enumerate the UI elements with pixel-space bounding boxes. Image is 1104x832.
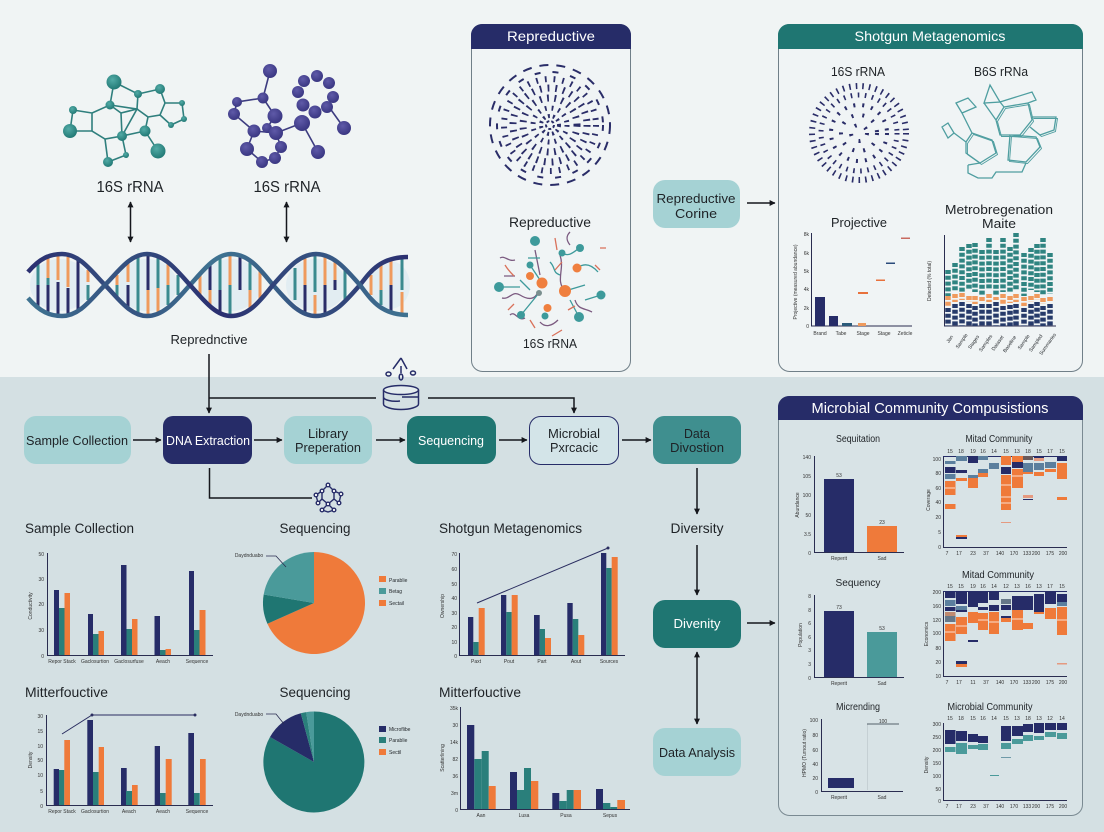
bar chart: mitterfouctive left — [28, 714, 213, 815]
chart: two bars navy orange: 100 — [803, 493, 811, 499]
chart: two bars navy teal — [798, 594, 904, 687]
arrow: double — [696, 652, 698, 724]
chart: stacked blocks 3: 23 — [970, 804, 976, 810]
chart: stacked blocks 3: 150 — [933, 761, 941, 767]
chart: two bars navy teal: 3 — [808, 648, 811, 654]
bar chart: sample collection: 50 — [38, 552, 44, 558]
chart: stacked blocks 1: 0 — [938, 545, 941, 551]
legend: Parablie — [389, 578, 408, 584]
bar chart: mitterfouctive left: Density — [28, 751, 34, 768]
heading: Mitad Community: Mitad Community — [966, 434, 1032, 445]
bar chart: mitterfouctive left: 10 — [37, 744, 43, 750]
chart: stacked blocks 3: 200 — [933, 748, 941, 754]
panel: Reproductive — [471, 24, 631, 372]
box: Sample Collection: Sample Collection — [26, 433, 128, 448]
chart: stacked dotted columns: Dataset — [991, 334, 1006, 352]
chart: stacked blocks 2: 7 — [946, 680, 949, 686]
chart: stacked blocks 3: 15 — [947, 716, 953, 722]
bar chart: shotgun metagenomics: Part — [537, 659, 547, 665]
heading: Mitterfouctive right: Mitterfouctive — [439, 684, 521, 700]
chart: stacked blocks 3: 14 — [1059, 716, 1065, 722]
chart: two bars navy orange — [795, 455, 904, 562]
chart: stacked blocks 3: 18 — [958, 716, 964, 722]
arrow — [696, 545, 698, 595]
heading: Mitterfouctive left: Mitterfouctive — [25, 684, 108, 700]
chart: stacked blocks 1: 18 — [1025, 449, 1031, 455]
bar chart: shotgun metagenomics: 30 — [451, 611, 457, 617]
bar chart: mitterfouctive left: Gaclosurtion — [81, 809, 109, 815]
chart: two bars navy teal: 0 — [808, 676, 811, 682]
bar chart: shotgun metagenomics: Ownership — [440, 594, 446, 618]
chart: stacked blocks 2: 11 — [970, 680, 976, 686]
bar chart: mitterfouctive right: Lusa — [519, 813, 530, 819]
chart: stacked blocks 1: 40 — [935, 500, 941, 506]
panel: Shotgun Metagenomics — [778, 24, 1083, 372]
chart: two bars navy orange: 50 — [805, 513, 811, 519]
panel title: Repreductive — [507, 28, 595, 44]
bar chart: mitterfouctive left: 15 — [37, 729, 43, 735]
chart: two bars navy teal: 3 — [808, 662, 811, 668]
chart: two bars navy teal: 6 — [808, 621, 811, 627]
heading: Microbial Community: Microbial Community — [948, 702, 1032, 713]
chart: stacked blocks 1: 15 — [1003, 449, 1009, 455]
chart: stacked blocks 2: 100 — [933, 631, 941, 637]
bar chart: mitterfouctive right: Scatterlining — [440, 744, 446, 772]
heading: Micrending: Micrending — [836, 702, 880, 713]
label: B6S rRNa: B6S rRNa — [974, 64, 1029, 79]
bar chart: sample collection: Gaclosurtion — [81, 659, 109, 665]
arrow — [133, 439, 161, 441]
heading: Shotgun Metagenomics chart: Shotgun Metagenomics — [439, 520, 582, 536]
chart: projective bars: Projective (measured abundance) — [793, 244, 799, 320]
bar chart: mitterfouctive right: 36 — [452, 774, 458, 780]
arrow: double right — [286, 202, 288, 242]
bar chart: shotgun metagenomics: 60 — [451, 567, 457, 573]
chart: projective bars: 6k — [804, 251, 809, 257]
chart: stacked blocks 2: 17 — [956, 680, 962, 686]
chart: stacked dotted columns: Sample — [955, 333, 970, 350]
chart: stacked blocks 3: 18 — [1025, 716, 1031, 722]
chart: stacked blocks 2: 200 — [1032, 680, 1040, 686]
box: Sequencing: Sequencing — [418, 433, 484, 448]
box: Library Preparation — [284, 416, 372, 464]
icon: radial dot ring — [812, 86, 906, 180]
box: Microbial Parcacic: Pxrcacic — [550, 440, 598, 455]
chart: stacked blocks 2: 133 — [1023, 680, 1031, 686]
chart: stacked blocks 3: 175 — [1046, 804, 1054, 810]
chart: projective bars: 8k — [804, 232, 809, 238]
heading: Sample Collection: Sample Collection — [25, 520, 134, 536]
label: 16S rRNA: 16S rRNA — [523, 336, 577, 351]
bar chart: mitterfouctive right: 0 — [455, 808, 458, 814]
chart: stacked blocks 1: 60 — [935, 486, 941, 492]
chart: stacked blocks 1: 14 — [991, 449, 997, 455]
chart: projective bars: 4k — [804, 287, 809, 293]
label: Metrobregenation Maite: Metrobregenation — [945, 202, 1053, 217]
box: Divenity — [653, 600, 741, 648]
label: Projective: Projective — [831, 215, 887, 230]
arrow — [696, 468, 698, 514]
chart: stacked blocks 1: 200 — [1032, 551, 1040, 557]
chart: stacked blocks 1: 18 — [958, 449, 964, 455]
chart: stacked dotted columns: Detected (% total) — [927, 261, 933, 301]
bar chart: sample collection: 20 — [38, 602, 44, 608]
bar chart: shotgun metagenomics: 50 — [451, 582, 457, 588]
chart: stacked blocks 3: 300 — [933, 722, 941, 728]
arrow — [254, 439, 282, 441]
chart: projective bars: Stage — [856, 331, 870, 337]
heading: Sequencing pie lower: Sequencing — [280, 684, 350, 700]
bar chart: shotgun metagenomics: 10 — [451, 640, 457, 646]
chart: stacked blocks 3: 13 — [1036, 716, 1042, 722]
box: DNA Extraction: DNA Extraction — [166, 433, 250, 448]
chart: stacked blocks 1: 133 — [1023, 551, 1031, 557]
chart: micrending bars: 80 — [812, 733, 818, 739]
heading: Sequency: Sequency — [836, 578, 880, 589]
chart: micrending bars: 0 — [815, 790, 818, 796]
bar chart: mitterfouctive right: Pusa — [560, 813, 572, 819]
chart: stacked blocks 1: 17 — [1047, 449, 1053, 455]
bar chart: shotgun metagenomics: 70 — [451, 552, 457, 558]
box: Library Preparation: Library — [308, 426, 348, 441]
chart: stacked blocks 3: 16 — [980, 716, 986, 722]
bar chart: mitterfouctive left: 30 — [37, 714, 43, 720]
connector: DNA Extraction to network icon — [210, 468, 343, 512]
bar chart: sample collection: Conductivity — [28, 592, 34, 620]
chart: stacked blocks 2: 175 — [1046, 680, 1054, 686]
label: Reprednctive: Reprednctive — [170, 332, 248, 347]
box: Data Analysis — [653, 728, 741, 776]
bar chart: sample collection: Repor Stack — [48, 659, 76, 665]
chart: stacked blocks 1: 37 — [983, 551, 989, 557]
arrow — [747, 622, 775, 624]
arrow — [376, 439, 405, 441]
heading: Sequencing pie: Sequencing — [280, 520, 350, 536]
chart: stacked blocks 3: 250 — [933, 735, 941, 741]
chart: stacked blocks 2: 200 — [933, 590, 941, 596]
box: Divenity: Divenity — [674, 616, 721, 631]
chart: stacked blocks 2: 12 — [1003, 584, 1009, 590]
chart: stacked blocks 1: 100 — [933, 457, 941, 463]
chart: stacked dotted columns: Samples — [978, 333, 995, 353]
chart: stacked blocks 3: 50 — [935, 787, 941, 793]
box: Microbial Parcacic — [530, 416, 618, 464]
label: Metrobregenation Maite — [945, 202, 1053, 231]
chart: stacked blocks 2: 15 — [1059, 584, 1065, 590]
legend — [379, 726, 411, 756]
process connector: top line with icon — [209, 354, 574, 413]
legend: Betag — [389, 589, 402, 595]
bar chart: mitterfouctive right: 82 — [452, 757, 458, 763]
chart: stacked blocks 2: 200 — [1059, 680, 1067, 686]
chart: stacked blocks 3: Density — [924, 756, 930, 773]
chart: stacked blocks 2: 16 — [1025, 584, 1031, 590]
chart: two bars navy teal: 8 — [808, 608, 811, 614]
panel title: Shotgun Metagenomics — [854, 28, 1006, 44]
bar chart: shotgun metagenomics: Paxt — [471, 659, 482, 665]
bar chart: shotgun metagenomics: Aout — [571, 659, 582, 665]
chart: stacked dotted columns: Baseline — [1002, 335, 1018, 354]
chart: stacked blocks 2: 37 — [983, 680, 989, 686]
bar chart: mitterfouctive left: 10 — [37, 773, 43, 779]
chart: stacked blocks 2: 16 — [980, 584, 986, 590]
legend — [379, 576, 408, 607]
panel header — [778, 396, 1083, 420]
chart: two bars navy orange: Abundance — [795, 492, 801, 518]
chart: stacked blocks 2: Economics — [924, 621, 930, 646]
chart: projective bars: Brand — [813, 331, 827, 337]
chart: micrending bars: Sad — [878, 795, 887, 801]
chart: stacked blocks 3: 7 — [946, 804, 949, 810]
icon: radial dashed ring — [490, 65, 610, 185]
bar chart: mitterfouctive left: Aeach — [156, 809, 170, 815]
chart: micrending bars: 60 — [812, 748, 818, 754]
box: Sequencing — [407, 416, 496, 464]
label: Metrobregenation Maite: Maite — [982, 216, 1016, 231]
chart: stacked blocks 2: 20 — [935, 660, 941, 666]
bar chart: mitterfouctive left: 5 — [40, 789, 43, 795]
chart: micrending bars: 40 — [812, 762, 818, 768]
pie chart: top — [235, 552, 408, 654]
bar chart: mitterfouctive right: Aan — [477, 813, 486, 819]
bar chart: sample collection: Aeach — [156, 659, 170, 665]
arrow: double left — [130, 202, 132, 242]
chart: micrending bars: HPMO (Turnout ratio) — [802, 729, 808, 777]
legend: Microflibe — [389, 727, 411, 733]
chart: stacked dotted columns: Sample — [1017, 334, 1032, 351]
chart: stacked blocks 1: 140 — [996, 551, 1004, 557]
chart: two bars navy teal: 73 — [836, 605, 842, 611]
chart: projective bars: Tabe — [836, 331, 847, 337]
chart: stacked blocks 2: 140 — [996, 680, 1004, 686]
icon: purple molecule — [228, 64, 351, 168]
bar chart: mitterfouctive left: 0 — [40, 804, 43, 810]
chart: two bars navy teal: 6 — [808, 635, 811, 641]
chart: stacked blocks 3 — [924, 716, 1067, 810]
chart: stacked blocks 1 — [926, 449, 1067, 557]
box: Data Analysis: Data Analysis — [659, 745, 735, 760]
box: Reproductive Corine: Corine — [675, 206, 717, 221]
bar chart: sample collection — [28, 552, 213, 665]
bar chart: mitterfouctive right — [440, 706, 630, 819]
bar chart: mitterfouctive left: Sequence — [186, 809, 208, 815]
heading: Sequitation: Sequitation — [836, 434, 880, 445]
chart: two bars navy orange: 23 — [879, 520, 885, 526]
chart: two bars navy teal: 53 — [879, 626, 885, 632]
bar chart: shotgun metagenomics: Pout — [504, 659, 515, 665]
label: 16S rRNA right: 16S rRNA — [254, 179, 321, 196]
chart: stacked dotted columns — [927, 233, 1058, 357]
chart: stacked blocks 1: 5 — [938, 530, 941, 536]
chart: two bars navy teal: 8 — [808, 594, 811, 600]
chart: stacked blocks 1: 175 — [1046, 551, 1054, 557]
chart: stacked blocks 2 — [924, 584, 1067, 686]
chart: stacked dotted columns: Jan — [945, 334, 955, 344]
chart: stacked blocks 2: 13 — [1014, 584, 1020, 590]
chart: stacked blocks 1: 23 — [970, 551, 976, 557]
pie chart: bottom — [235, 712, 411, 812]
box: DNA Extraction — [163, 416, 252, 464]
chart: stacked blocks 3: 200 — [1032, 804, 1040, 810]
chart: stacked blocks 3: 140 — [996, 804, 1004, 810]
arrow — [499, 439, 527, 441]
chart: stacked blocks 2: 14 — [991, 584, 997, 590]
bar chart: shotgun metagenomics: 20 — [451, 625, 457, 631]
bar chart: mitterfouctive right: 14k — [450, 740, 458, 746]
chart: stacked blocks 1: 7 — [946, 551, 949, 557]
chart: micrending bars: 100 — [810, 718, 818, 724]
chart: stacked blocks 1: 170 — [1010, 551, 1018, 557]
legend: Sectil — [389, 750, 401, 756]
chart: two bars navy teal: Reperit — [831, 681, 848, 687]
chart: stacked blocks 1: 17 — [956, 551, 962, 557]
bar chart: mitterfouctive left: 50 — [37, 758, 43, 764]
DNA double helix — [28, 254, 410, 316]
icon: teal molecule — [63, 74, 187, 167]
chart: stacked blocks 1: 15 — [1036, 449, 1042, 455]
chart: stacked blocks 1: 15 — [947, 449, 953, 455]
chart: two bars navy orange: 53 — [836, 473, 842, 479]
icon: outline molecule — [942, 85, 1058, 178]
bar chart: sample collection: Gaclosurfuse — [114, 659, 144, 665]
box: Data Divostion: Data — [684, 426, 711, 441]
chart: stacked blocks 3: 0 — [938, 799, 941, 805]
chart: stacked blocks 3: 133 — [1023, 804, 1031, 810]
bar chart: mitterfouctive right: Sepus — [603, 813, 618, 819]
icon: database and branches — [384, 358, 418, 410]
legend: Parablie — [389, 738, 408, 744]
box: Library Preparation: Preperation — [295, 440, 361, 455]
chart: stacked blocks 1: 13 — [1014, 449, 1020, 455]
chart: projective bars: Zeticle — [898, 331, 913, 337]
arrow: to Shotgun panel — [747, 202, 775, 204]
chart: stacked blocks 2: 13 — [1036, 584, 1042, 590]
bar chart: mitterfouctive right: 3m — [451, 791, 458, 797]
chart: stacked blocks 3: 17 — [956, 804, 962, 810]
panel title: Microbial Community Compusistions — [812, 400, 1048, 417]
box: Data Divostion — [653, 416, 741, 464]
pie chart: top: Daydnduabo — [235, 553, 263, 559]
chart: stacked blocks 3: 170 — [1010, 804, 1018, 810]
chart: two bars navy orange: 140 — [803, 455, 811, 461]
heading: Mixed Community: Mitad Community — [962, 570, 1034, 581]
chart: micrending bars — [802, 718, 903, 801]
chart: projective bars: 2k — [804, 306, 809, 312]
chart: stacked blocks 2: 170 — [1010, 680, 1018, 686]
chart: stacked blocks 2: 120 — [933, 618, 941, 624]
bar chart: mitterfouctive right: 30 — [452, 723, 458, 729]
chart: stacked blocks 3: 14 — [991, 716, 997, 722]
bar chart: sample collection: Sequence — [186, 659, 208, 665]
chart: stacked dotted columns: Summaries — [1038, 332, 1058, 357]
chart: micrending bars: Reperit — [831, 795, 848, 801]
panel header — [778, 24, 1083, 49]
chart: two bars navy orange: 3.5 — [804, 532, 811, 538]
chart: stacked blocks 1: 80 — [935, 471, 941, 477]
chart: stacked blocks 1: 16 — [980, 449, 986, 455]
chart: micrending bars: 100 — [879, 719, 887, 725]
chart: micrending bars: 20 — [812, 776, 818, 782]
arrow — [622, 439, 651, 441]
chart: stacked blocks 2: 80 — [935, 646, 941, 652]
chart: two bars navy orange: Sad — [878, 556, 887, 562]
chart: two bars navy orange: 105 — [803, 474, 811, 480]
chart: stacked blocks 3: 37 — [983, 804, 989, 810]
bar chart: shotgun metagenomics: Sources — [600, 659, 619, 665]
legend: Sectail — [389, 601, 404, 607]
bar chart: mitterfouctive right: 35k — [450, 706, 458, 712]
bar chart: sample collection: 0 — [41, 654, 44, 660]
chart: stacked blocks 1: Coverage — [926, 489, 932, 511]
chart: stacked blocks 2: 17 — [1047, 584, 1053, 590]
bar chart: shotgun metagenomics: 40 — [451, 596, 457, 602]
bar chart: shotgun metagenomics: 0 — [454, 654, 457, 660]
chart: projective bars — [793, 232, 913, 337]
label: Diversity: Diversity — [670, 520, 724, 536]
label: 16S rRNA: 16S rRNA — [831, 64, 885, 79]
label: Reproductive mid: Repreductive — [509, 214, 591, 230]
box: Data Divostion: Divostion — [670, 440, 724, 455]
chart: stacked blocks 1: 20 — [935, 515, 941, 521]
chart: two bars navy teal: Sad — [878, 681, 887, 687]
bar chart: mitterfouctive left: Aeach — [122, 809, 136, 815]
panel: Microbial Community Compositions — [778, 396, 1083, 816]
chart: stacked blocks 3: 100 — [933, 774, 941, 780]
chart: two bars navy orange: 0 — [808, 551, 811, 557]
box: Reproductive Corine: Repreductive — [656, 191, 736, 206]
chart: stacked blocks 1: 19 — [970, 449, 976, 455]
chart: stacked dotted columns: Sampled — [1028, 333, 1044, 353]
chart: stacked blocks 1: 15 — [1059, 449, 1065, 455]
chart: stacked blocks 3: 200 — [1059, 804, 1067, 810]
chart: projective bars: 5k — [804, 269, 809, 275]
bar chart: sample collection: 30 — [38, 628, 44, 634]
chart: projective bars: Stage — [877, 331, 891, 337]
bar chart: sample collection: 30 — [38, 577, 44, 583]
chart: projective bars: 0 — [806, 324, 809, 330]
chart: stacked blocks 1: 200 — [1059, 551, 1067, 557]
box: Microbial Parcacic: Microbial — [548, 426, 600, 441]
icon: network — [314, 483, 343, 512]
chart: two bars navy teal: Population — [798, 623, 804, 647]
chart: stacked blocks 2: 15 — [947, 584, 953, 590]
bar chart: mitterfouctive left: Repor Stack — [48, 809, 76, 815]
chart: stacked blocks 3: 15 — [970, 716, 976, 722]
chart: stacked blocks 2: 160 — [933, 604, 941, 610]
chart: stacked blocks 2: 15 — [958, 584, 964, 590]
chart: stacked blocks 2: 10 — [935, 674, 941, 680]
box: Sample Collection — [24, 416, 131, 464]
label: 16S rRNA left: 16S rRNA — [96, 179, 164, 196]
chart: stacked blocks 2: 19 — [970, 584, 976, 590]
box: Reproductive Corine — [653, 180, 740, 228]
panel header — [471, 24, 631, 49]
icon: microbe cluster — [494, 232, 606, 336]
chart: stacked blocks 3: 13 — [1014, 716, 1020, 722]
bar chart: shotgun metagenomics — [440, 546, 625, 665]
chart: stacked blocks 3: 12 — [1047, 716, 1053, 722]
chart: stacked dotted columns: Stages — [967, 334, 981, 351]
chart: stacked blocks 3: 15 — [1003, 716, 1009, 722]
pie chart: bottom: Daydnduabo — [235, 712, 263, 718]
chart: two bars navy orange: Reperit — [831, 556, 848, 562]
